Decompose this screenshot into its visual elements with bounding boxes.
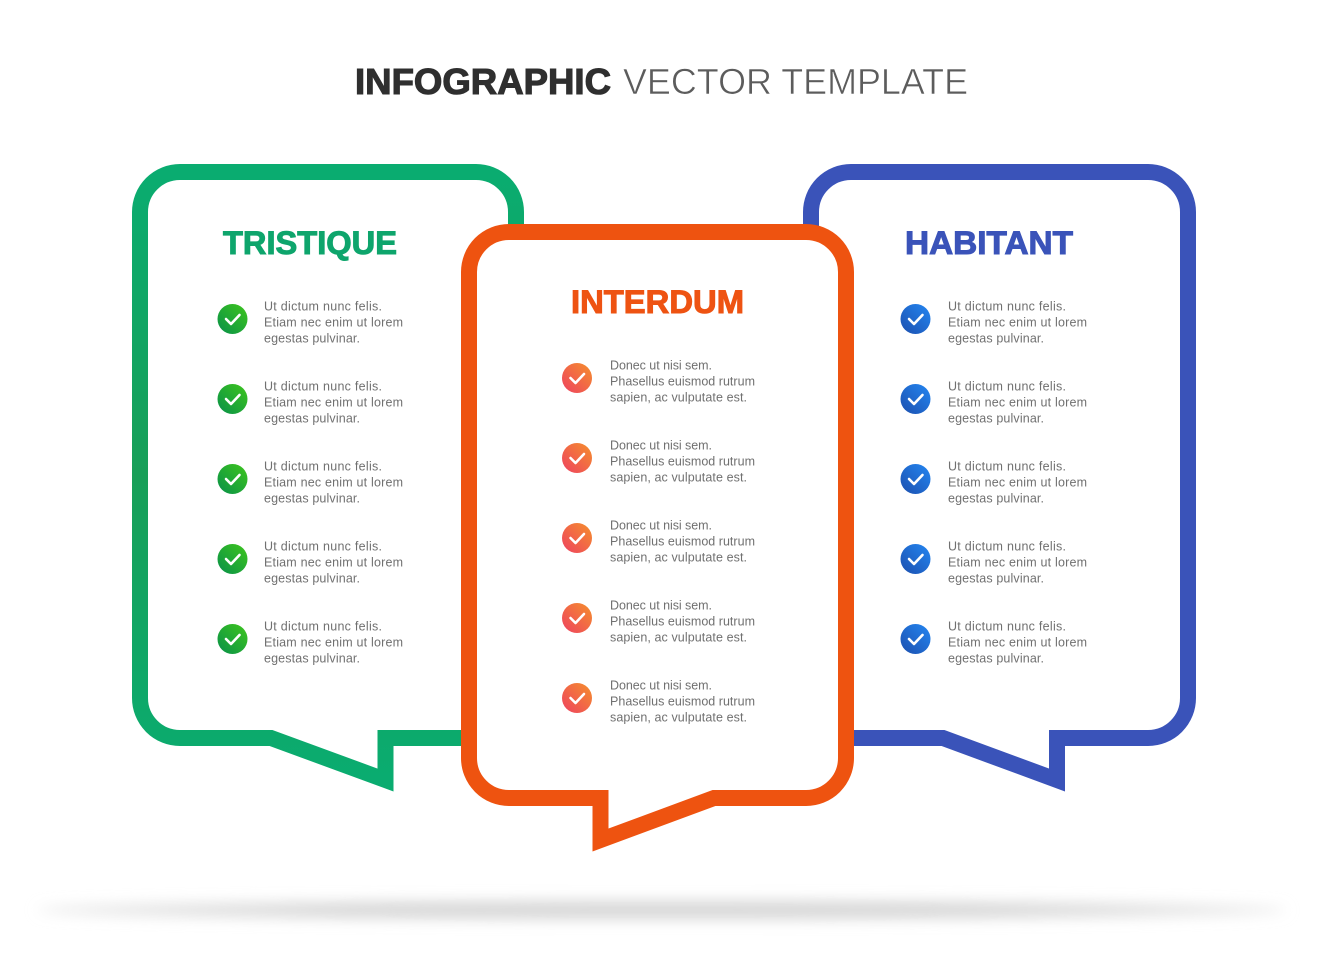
- list item 4: Ut dictum nunc felis.: [264, 540, 382, 554]
- list item 5: [218, 620, 403, 666]
- list item 4: Phasellus euismod rutrum: [610, 614, 755, 628]
- list item 4: egestas pulvinar.: [264, 572, 360, 586]
- list item 4: egestas pulvinar.: [948, 572, 1044, 586]
- heading: tristique: TRISTIQUE: [223, 225, 397, 261]
- list item 5: Etiam nec enim ut lorem: [264, 636, 403, 650]
- list item 2: [900, 380, 1087, 426]
- list item 3: Ut dictum nunc felis.: [264, 460, 382, 474]
- list item 1: egestas pulvinar.: [948, 332, 1044, 346]
- list item 5: Phasellus euismod rutrum: [610, 694, 755, 708]
- list item 3: [900, 460, 1087, 506]
- list item 4: Etiam nec enim ut lorem: [948, 556, 1087, 570]
- list item 4: [562, 598, 755, 644]
- list item 3: [218, 460, 403, 506]
- list item 3: Ut dictum nunc felis.: [948, 460, 1066, 474]
- panel: habitant: [811, 172, 1188, 780]
- list item 1: egestas pulvinar.: [264, 332, 360, 346]
- ground shadow: [37, 901, 1287, 919]
- list item 2: Etiam nec enim ut lorem: [264, 396, 403, 410]
- title: INFOGRAPHIC: [355, 61, 611, 102]
- list item 5: egestas pulvinar.: [264, 652, 360, 666]
- list item 1: Donec ut nisi sem.: [610, 358, 712, 372]
- list item 5: Donec ut nisi sem.: [610, 678, 712, 692]
- list item 2: Ut dictum nunc felis.: [948, 380, 1066, 394]
- list item 5: [900, 620, 1087, 666]
- list item 5: egestas pulvinar.: [948, 652, 1044, 666]
- list item 3: egestas pulvinar.: [948, 492, 1044, 506]
- list item 3: Etiam nec enim ut lorem: [264, 476, 403, 490]
- list item 3: Phasellus euismod rutrum: [610, 534, 755, 548]
- list item 2: egestas pulvinar.: [264, 412, 360, 426]
- list item 2: Phasellus euismod rutrum: [610, 454, 755, 468]
- list item 3: egestas pulvinar.: [264, 492, 360, 506]
- list item 1: sapien, ac vulputate est.: [610, 390, 747, 404]
- list item 1: Ut dictum nunc felis.: [264, 300, 382, 314]
- speech bubble: blue: [811, 172, 1188, 780]
- title: VECTOR TEMPLATE: [623, 61, 968, 102]
- list item 2: Etiam nec enim ut lorem: [948, 396, 1087, 410]
- list item 5: [562, 678, 755, 724]
- list item 3: Etiam nec enim ut lorem: [948, 476, 1087, 490]
- list item 2: [218, 380, 403, 426]
- heading: habitant: HABITANT: [905, 225, 1073, 261]
- list item 1: Etiam nec enim ut lorem: [264, 316, 403, 330]
- list item 5: Ut dictum nunc felis.: [948, 620, 1066, 634]
- speech bubble: orange: [469, 232, 846, 840]
- list item 3: [562, 518, 755, 564]
- list item 2: egestas pulvinar.: [948, 412, 1044, 426]
- list item 2: sapien, ac vulputate est.: [610, 470, 747, 484]
- list item 4: [218, 540, 403, 586]
- list item 3: sapien, ac vulputate est.: [610, 550, 747, 564]
- list item 1: Ut dictum nunc felis.: [948, 300, 1066, 314]
- list item 4: [900, 540, 1087, 586]
- list item 3: Donec ut nisi sem.: [610, 518, 712, 532]
- list item 5: sapien, ac vulputate est.: [610, 710, 747, 724]
- panel: tristique: [140, 172, 516, 780]
- list item 4: Etiam nec enim ut lorem: [264, 556, 403, 570]
- title: [355, 61, 968, 102]
- list item 4: Ut dictum nunc felis.: [948, 540, 1066, 554]
- panel: interdum: [469, 232, 846, 840]
- speech bubble: green: [140, 172, 516, 780]
- heading: interdum: INTERDUM: [571, 284, 744, 320]
- list item 1: [562, 358, 755, 404]
- list item 1: Phasellus euismod rutrum: [610, 374, 755, 388]
- list item 4: sapien, ac vulputate est.: [610, 630, 747, 644]
- list item 5: Ut dictum nunc felis.: [264, 620, 382, 634]
- list item 2: Donec ut nisi sem.: [610, 438, 712, 452]
- list item 1: [900, 300, 1087, 346]
- list item 2: [562, 438, 755, 484]
- list item 2: Ut dictum nunc felis.: [264, 380, 382, 394]
- list item 5: Etiam nec enim ut lorem: [948, 636, 1087, 650]
- list item 1: [218, 300, 403, 346]
- list item 4: Donec ut nisi sem.: [610, 598, 712, 612]
- list item 1: Etiam nec enim ut lorem: [948, 316, 1087, 330]
